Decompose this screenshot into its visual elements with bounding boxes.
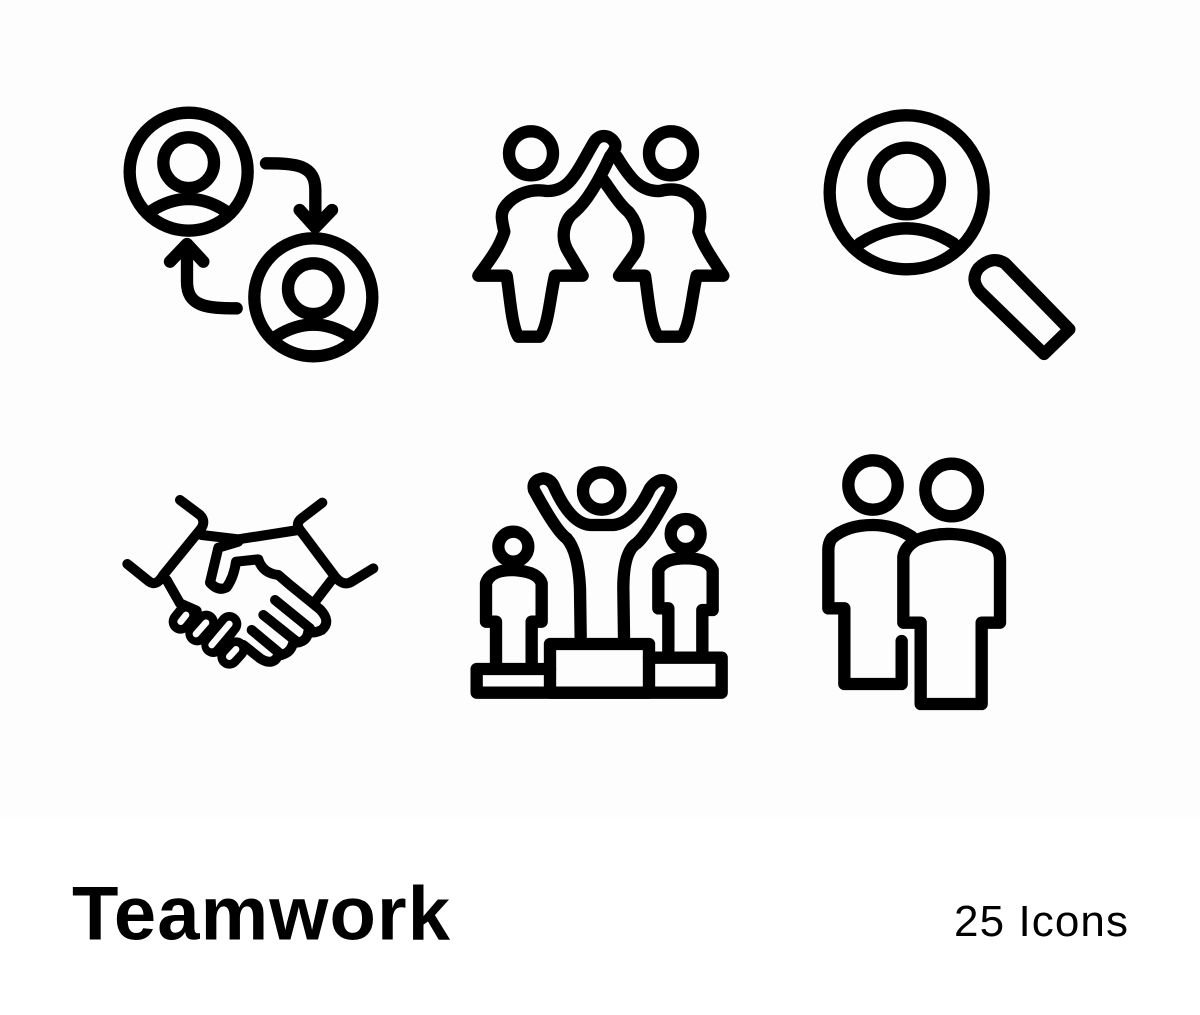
icon: handshake bbox=[127, 500, 373, 662]
icon count: 25 Icons bbox=[954, 897, 1128, 946]
icon: two people standing bbox=[828, 460, 1000, 704]
icon: magnifier over person bbox=[830, 115, 1069, 354]
title: Teamwork bbox=[72, 872, 451, 956]
icon: winners podium bbox=[477, 472, 722, 693]
icon: people exchange bbox=[130, 113, 372, 356]
icon: high five bbox=[478, 131, 723, 337]
